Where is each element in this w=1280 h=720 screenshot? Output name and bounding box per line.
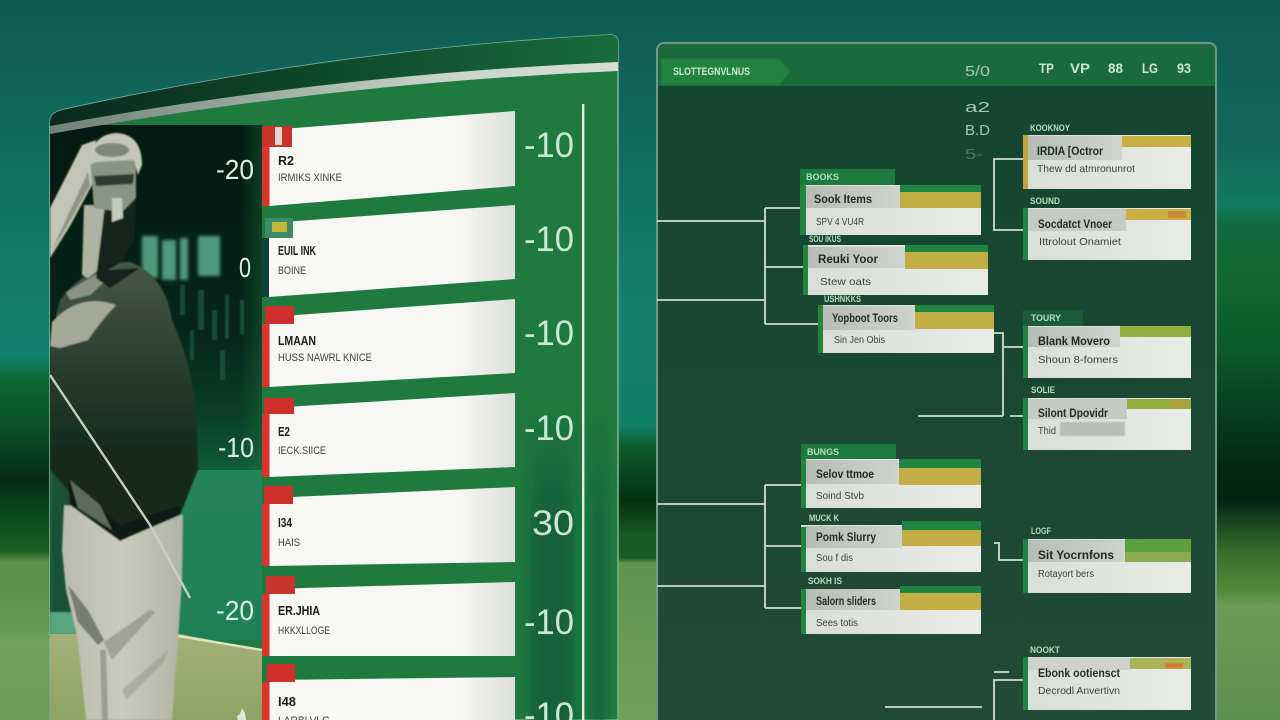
card: point slurry: Pomk Slurry xyxy=(816,532,877,544)
card: round items xyxy=(803,234,988,295)
row 4: E2 xyxy=(278,424,290,439)
card: semifinal second: Ittrolout Onamiet xyxy=(1039,236,1121,248)
row 2 xyxy=(262,205,515,297)
card: point slurry xyxy=(801,513,981,572)
belt shading xyxy=(68,480,180,541)
card: semifinal second: SOUND xyxy=(1030,196,1060,207)
right score column xyxy=(524,126,574,720)
round numbers: a2 xyxy=(965,99,990,116)
left score column: -10 xyxy=(218,432,254,463)
round numbers xyxy=(965,63,990,163)
card: final: Ebonk ootiensct xyxy=(1038,668,1120,680)
right score column: -10 xyxy=(524,603,574,642)
shoulder xyxy=(50,301,116,348)
golfer figure xyxy=(50,133,198,720)
golf club xyxy=(50,375,190,598)
shirt xyxy=(50,262,198,540)
card: silent provider: Thid xyxy=(1038,425,1056,437)
row 6: ER.JHIA xyxy=(278,603,320,618)
card: select times: Selov ttmoe xyxy=(816,469,874,481)
trousers xyxy=(62,505,183,720)
card: final xyxy=(1023,645,1191,710)
neck xyxy=(81,204,106,279)
row 1: R2 xyxy=(278,153,294,168)
card: yopboot items: Sin Jen Obis xyxy=(834,334,885,346)
card: book items: Sook Items xyxy=(814,194,872,206)
card: yopboot items: Yopboot Toors xyxy=(832,313,898,325)
round numbers: B.D xyxy=(965,122,990,139)
card: semifinal second: Socdatct Vnoer xyxy=(1038,219,1112,231)
card: book items: BOOKS xyxy=(806,172,839,183)
row 5: HAIS xyxy=(278,537,300,549)
card: select times xyxy=(801,444,981,508)
card: select times: BUNGS xyxy=(807,447,839,458)
row 3: LMAAN xyxy=(278,333,316,348)
card: semifinal top xyxy=(1023,123,1191,189)
right score column: 30 xyxy=(532,504,574,543)
card: semifinal top: IRDIA [Octror xyxy=(1037,146,1103,158)
card: point slurry: Sou f dis xyxy=(816,552,853,564)
row 6: HKKXLLOGE xyxy=(278,625,330,637)
card: quarter vote: Rotayort bers xyxy=(1038,568,1094,580)
card: book items: SPV 4 VU4R xyxy=(816,216,864,228)
card: salon sliders: Salorn sliders xyxy=(816,596,876,608)
card: salon sliders xyxy=(801,576,981,634)
card: salon sliders: Sees totis xyxy=(816,617,858,629)
darker scale column xyxy=(530,420,574,720)
card: silent provider xyxy=(1023,385,1191,450)
small distant figure xyxy=(237,708,246,720)
card: blank mover xyxy=(1023,310,1191,378)
row 3: HUSS NAWRL KNICE xyxy=(278,352,372,364)
card: round items: Reuki Yoor xyxy=(818,254,879,266)
tag xyxy=(264,398,294,414)
bracket header bar: VP xyxy=(1070,60,1090,76)
bracket header bar: TP xyxy=(1039,60,1054,76)
card: round items: SOU IKUS xyxy=(809,234,841,245)
round numbers: 5/0 xyxy=(965,63,990,80)
row 5: I34 xyxy=(278,515,293,530)
card: semifinal second xyxy=(1023,196,1191,260)
card: semifinal top: KOOKNOY xyxy=(1030,123,1071,134)
row 5 xyxy=(262,486,515,566)
card: salon sliders: SOKH IS xyxy=(808,576,842,587)
beard and throat xyxy=(96,200,140,288)
card: silent provider: Silont Dpovidr xyxy=(1038,408,1108,420)
card: quarter vote: LOGF xyxy=(1031,526,1051,537)
tag xyxy=(265,218,293,238)
background trees xyxy=(142,236,220,280)
left score column: -20 xyxy=(216,154,254,185)
row 3 xyxy=(262,299,515,387)
card: final: NOOKT xyxy=(1030,645,1060,656)
card: quarter vote: Sit Yocrnfons xyxy=(1038,550,1114,562)
cap xyxy=(90,133,142,175)
card: silent provider: SOLIE xyxy=(1031,385,1055,396)
tag xyxy=(267,664,295,682)
fairway xyxy=(50,634,262,720)
card: blank mover: TOURY xyxy=(1031,313,1062,324)
right score column: -10 xyxy=(524,314,574,353)
highlight stripe xyxy=(50,62,618,134)
right score column: -10 xyxy=(524,409,574,448)
connector lines xyxy=(657,159,1028,720)
row 1 xyxy=(262,111,515,206)
row 2: EUIL INK xyxy=(278,243,316,258)
panel: leaderboard xyxy=(50,33,618,720)
card: blank mover: Shoun 8-fomers xyxy=(1038,354,1118,366)
card: yopboot items: USHNKKS xyxy=(824,294,861,305)
leaderboard top band xyxy=(50,33,618,130)
left score column: -20 xyxy=(216,595,254,626)
row 7: I48 xyxy=(278,694,296,709)
raised arm xyxy=(50,140,96,258)
card: book items xyxy=(800,169,981,235)
round numbers: 5- xyxy=(965,146,983,163)
card: quarter vote xyxy=(1023,526,1191,593)
tag xyxy=(262,126,292,147)
bracket header bar: 93 xyxy=(1177,60,1191,76)
left score column: 0 xyxy=(239,252,251,283)
face xyxy=(90,160,136,212)
card: select times: Soind Stvb xyxy=(816,490,864,502)
right score column: -10 xyxy=(524,220,574,259)
card: point slurry: MUCK K xyxy=(809,513,839,524)
tag xyxy=(266,576,295,594)
golfer photo xyxy=(50,125,262,720)
row 2: BOINE xyxy=(278,265,306,277)
card: blank mover: Blank Movero xyxy=(1038,336,1110,348)
tag xyxy=(265,306,294,324)
panel: bracket xyxy=(657,43,1216,720)
dark foliage xyxy=(180,285,244,380)
bracket header bar: LG xyxy=(1142,60,1158,76)
row 1: IRMIKS XINKE xyxy=(278,172,342,184)
row 6 xyxy=(262,576,515,656)
card: round items: Stew oats xyxy=(820,276,871,288)
bracket header bar: SLOTTEGNVLNUS xyxy=(673,66,750,78)
score scale line xyxy=(582,104,584,720)
bracket header bar xyxy=(658,44,1215,86)
card: final: Decrodl Anvertivn xyxy=(1038,685,1120,697)
card: semifinal top: Thew dd atmronunrot xyxy=(1037,163,1135,175)
left score column xyxy=(216,154,254,626)
row 7 xyxy=(262,664,515,720)
row 4: IECK.SIICE xyxy=(278,445,326,457)
tag xyxy=(264,486,293,504)
card: yopboot items xyxy=(818,294,994,353)
row 4 xyxy=(262,393,515,477)
right score column: -10 xyxy=(524,126,574,165)
bracket header bar: 88 xyxy=(1108,60,1123,76)
